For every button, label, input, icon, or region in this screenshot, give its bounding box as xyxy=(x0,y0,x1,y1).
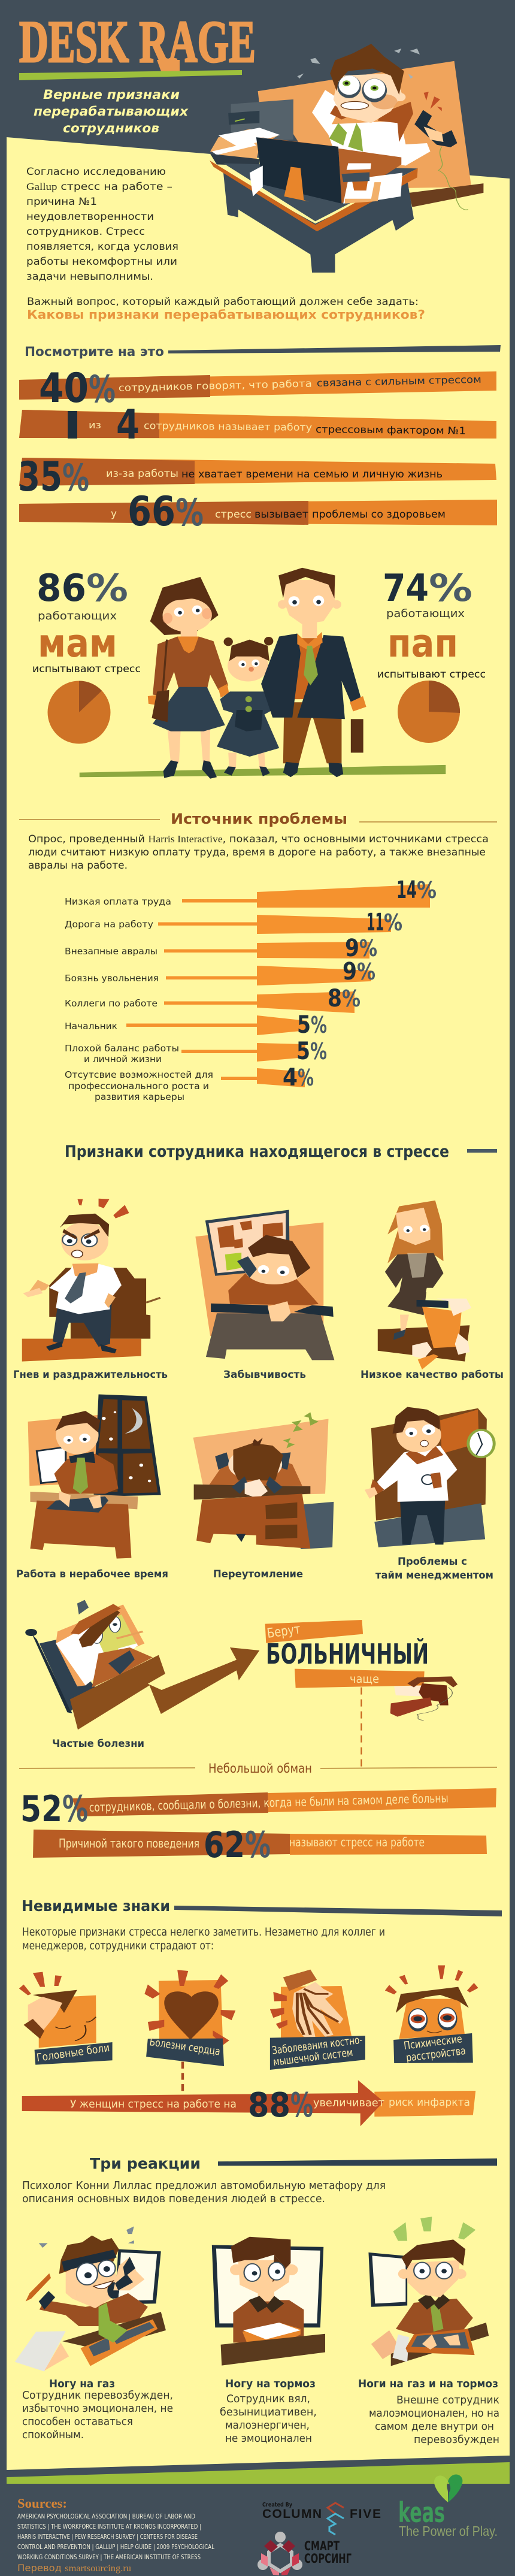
row: lack of growth 4%: Отсутсвие возможностей для xyxy=(65,1069,213,1080)
intro paragraph: неудовлетворенности xyxy=(26,211,154,223)
stat bar: 35%: % xyxy=(62,456,89,500)
row: work-life balance 5%: % xyxy=(310,1038,327,1065)
row: colleagues 8% xyxy=(65,985,360,1013)
moms stat: испытывают стресс xyxy=(32,663,141,675)
column: foot on gas: спокойным. xyxy=(22,2429,84,2441)
phone xyxy=(414,110,458,147)
column: foot on gas: избыточно эмоционален, не xyxy=(22,2403,173,2415)
column: feet on both: малоэмоционален, но на xyxy=(369,2408,499,2420)
stat bar: 66%: % xyxy=(175,491,204,534)
arrow text: women stress 88%: У женщин стресс на работе на xyxy=(70,2098,237,2111)
row: boss 5% xyxy=(65,1011,327,1039)
stat bar: 1 of 4: 4 xyxy=(116,401,140,449)
row: boss 5%: % xyxy=(311,1012,327,1038)
key question: Важный вопрос, который каждый работающий должен себе задать: xyxy=(27,296,419,308)
stat bar: 62%: называют стресс на работе xyxy=(289,1835,425,1849)
captions: signs of stress: тайм менеджментом xyxy=(375,1570,493,1582)
title underline xyxy=(19,70,242,80)
row: fear of layoff 9% xyxy=(65,958,375,985)
phone cord xyxy=(438,147,468,210)
dads stat xyxy=(377,566,486,681)
daughter xyxy=(217,637,279,776)
moms stat xyxy=(32,566,141,675)
stat bar: 35% xyxy=(18,453,496,501)
stat bar: 66%: проблемы со здоровьем xyxy=(312,509,446,520)
intro paragraph: причина №1 xyxy=(26,196,97,208)
mother xyxy=(148,577,229,779)
label: mental disorders: расстройства xyxy=(405,2045,466,2064)
icon: heart disease xyxy=(144,1970,235,2045)
intro paragraph: сотрудников. Стресс xyxy=(26,226,145,238)
stat bar: 66% xyxy=(19,488,497,536)
icon: working overtime at night xyxy=(28,1394,161,1559)
sources: Перевод smartsourcing.ru xyxy=(17,2562,131,2574)
wall panel xyxy=(258,61,471,189)
row: boss 5%: 5 xyxy=(297,1011,311,1039)
column: feet on both: Ноги на газ и на тормоз xyxy=(358,2378,498,2390)
stat bar: 52%: 52 xyxy=(20,1788,62,1830)
dads stat: % xyxy=(429,566,472,610)
dads stat: пап xyxy=(387,621,458,666)
ground xyxy=(80,765,446,777)
arrow: heart attack risk xyxy=(22,2080,475,2126)
label: heart disease: Болезни сердца xyxy=(149,2036,221,2058)
papers and coffee xyxy=(343,173,402,204)
heading: look at this: Посмотрите на это xyxy=(25,344,164,359)
intro paragraph: работы некомфортны или xyxy=(26,256,177,268)
sources: CONTROL AND PREVENTION | GALLUP | HELP GUIDE | 2009 PSYCHOLOGICAL xyxy=(17,2543,215,2551)
row: lack of growth 4%: развития карьеры xyxy=(95,1092,184,1102)
column: feet on both: перевозбужден xyxy=(414,2434,499,2446)
row: work-life balance 5% xyxy=(65,1038,327,1065)
row: colleagues 8%: % xyxy=(342,985,360,1012)
title: DESK RAGE xyxy=(19,8,256,75)
moms stat: % xyxy=(86,566,128,610)
subtitle: перерабатывающих xyxy=(34,104,189,119)
invisible signs paragraph: менеджеров, сотрудники страдают от: xyxy=(22,1939,214,1952)
dashed connector xyxy=(180,2062,185,2095)
stat bar: 1 of 4: стрессовым фактором №1 xyxy=(316,424,466,437)
pie chart: dads 74% xyxy=(398,681,460,743)
row: colleagues 8%: Коллеги по работе xyxy=(65,998,157,1009)
column: foot on brake: безынициативен, xyxy=(220,2406,317,2418)
intro paragraph: появляется, когда условия xyxy=(26,241,178,253)
intro paragraph xyxy=(26,166,178,283)
stat bar: 52% xyxy=(20,1788,496,1830)
tie xyxy=(329,123,347,146)
row: commute 11%: Дорога на работу xyxy=(65,919,153,930)
column: foot on gas xyxy=(22,2378,173,2441)
stat bar: 40% xyxy=(19,365,496,412)
illustration: frequent illness with arrow xyxy=(25,1600,458,1767)
stat bar: 62%: % xyxy=(245,1824,271,1866)
arrow text: women stress 88%: % xyxy=(290,2086,313,2125)
row: sudden rush jobs 9% xyxy=(65,935,377,962)
stat bar: 1 of 4: из xyxy=(89,419,101,431)
dads stat: 74 xyxy=(383,566,429,610)
column: foot on brake: Сотрудник вял, xyxy=(226,2393,310,2405)
pillow and sick man xyxy=(56,1600,153,1688)
moms stat: мам xyxy=(38,621,117,666)
logo: keas: The Power of Play. xyxy=(399,2523,498,2539)
stat bar: 1 of 4: сотрудников называет работу xyxy=(144,420,312,433)
illustration: stressed man at desk xyxy=(210,44,483,273)
row: sudden rush jobs 9%: % xyxy=(359,935,377,962)
heading: source of the problem: Источник проблемы xyxy=(171,811,347,827)
desk base xyxy=(223,173,414,273)
paper stack xyxy=(210,129,279,161)
heading: invisible signs: Невидимые знаки xyxy=(22,1897,170,1915)
stat bar: 62% xyxy=(33,1824,487,1866)
captions: signs of stress: Забывчивость xyxy=(223,1369,306,1381)
captions: signs of stress: Низкое качество работы xyxy=(360,1369,504,1381)
logo: keas xyxy=(398,2475,498,2539)
icon: telephone xyxy=(390,1676,458,1721)
sources: STATISTICS | THE WORKFORCE INSTITUTE AT KRONOS INCORPORATED | xyxy=(17,2523,201,2530)
stat bar: 62%: 62 xyxy=(204,1824,245,1866)
column: foot on brake: не эмоционален xyxy=(225,2433,312,2445)
stat bar: 62%: Причиной такого поведения xyxy=(59,1836,199,1851)
invisible signs paragraph: Некоторые признаки стресса нелегко заметить. Незаметно для коллег и xyxy=(22,1925,385,1939)
row: commute 11%: % xyxy=(384,909,402,936)
sign text: take: Берут xyxy=(266,1622,301,1641)
logo: column five: FIVE xyxy=(350,2507,381,2521)
intro paragraph: Gallup стресс на работе – xyxy=(26,181,172,193)
icon: headache xyxy=(19,1972,96,2048)
icon: forgetful worker xyxy=(195,1210,334,1360)
column: foot on brake xyxy=(220,2378,317,2445)
illustrations: three reactions xyxy=(15,2217,489,2372)
arrow text: women stress 88%: увеличивает xyxy=(313,2097,384,2109)
three reactions paragraph: описания основных видов поведения людей в стрессе. xyxy=(22,2193,325,2205)
stat bar: 66%: 66 xyxy=(128,488,175,536)
sources: Sources: xyxy=(17,2496,67,2511)
logo: smart sourcing xyxy=(258,2532,352,2575)
sweat drops xyxy=(297,49,420,79)
heading: invisible signs xyxy=(22,1897,502,1916)
stat bar: 35%: не хватает времени на семью и личную жизнь xyxy=(181,468,443,480)
source paragraph: люди считают низкую оплату труда, время в дороге на работу, а также внезапные xyxy=(28,846,486,858)
heading: three reactions xyxy=(90,2155,497,2172)
icon: feet on both xyxy=(368,2217,489,2366)
row: lack of growth 4%: % xyxy=(298,1065,314,1091)
dads stat: испытывают стресс xyxy=(377,669,486,681)
stat bar: 40%: % xyxy=(89,367,116,411)
row: lack of growth 4% xyxy=(65,1064,314,1102)
icon: foot on brake xyxy=(212,2237,325,2366)
captions: signs of stress: Переутомление xyxy=(213,1568,303,1580)
column: feet on both: Внешне сотрудник xyxy=(396,2394,499,2406)
arrow text: women stress 88% xyxy=(70,2086,470,2125)
logo: keas: keas xyxy=(398,2496,445,2529)
label: mental disorders: Психические xyxy=(403,2033,463,2052)
logo: column five xyxy=(262,2502,381,2535)
stat bar: 35%: 35 xyxy=(18,453,62,501)
label: musculoskeletal disease xyxy=(271,2034,363,2069)
arrow xyxy=(70,1647,259,1730)
head xyxy=(334,73,402,123)
logo: smart sourcing: СОРСИНГ xyxy=(304,2551,352,2566)
captions: signs of stress: Работа в нерабочее время xyxy=(16,1568,168,1580)
heading: signs of a stressed employee: Признаки сотрудника находящегося в стрессе xyxy=(65,1142,449,1161)
label: musculoskeletal disease: мышечной систем xyxy=(272,2046,354,2069)
invisible signs paragraph xyxy=(22,1925,385,1952)
column: foot on brake: малоэнергичен, xyxy=(225,2420,310,2432)
subtitle: сотрудников xyxy=(63,121,159,135)
sources: WORKING CONDITIONS SURVEY | THE AMERICAN INSTITUTE OF STRESS xyxy=(17,2553,201,2561)
three reactions paragraph: Психолог Конни Лиллас предложил автомобильную метафору для xyxy=(22,2180,386,2192)
icon: foot on gas xyxy=(15,2226,166,2372)
column: foot on gas: Ногу на газ xyxy=(49,2378,115,2390)
column: feet on both: самом деле внутри он xyxy=(375,2421,494,2433)
illustrations: signs of stress xyxy=(22,1199,496,1559)
logo: column five: COLUMN xyxy=(262,2507,322,2521)
logo: smart sourcing: СМАРТ xyxy=(304,2539,340,2553)
row: low pay 14%: Низкая оплата труда xyxy=(65,896,171,907)
row: low pay 14% xyxy=(65,876,437,908)
source paragraph xyxy=(28,833,489,871)
icon: exhausted sleeper xyxy=(193,1412,334,1549)
column: feet on both xyxy=(358,2378,499,2446)
icon: mental disorders xyxy=(385,1966,478,2039)
icon: woman with poor work quality xyxy=(378,1201,471,1369)
row: colleagues 8%: 8 xyxy=(328,985,342,1012)
arrow text: women stress 88%: 88 xyxy=(248,2086,290,2125)
caption: frequent illness: Частые болезни xyxy=(52,1738,144,1750)
stat bar: 52%: % xyxy=(62,1788,88,1830)
chair xyxy=(25,1629,95,1713)
illustrations: invisible symptoms xyxy=(19,1966,478,2126)
row: sudden rush jobs 9%: 9 xyxy=(345,935,359,962)
dads stat: работающих xyxy=(386,607,465,620)
row: lack of growth 4%: 4 xyxy=(283,1064,298,1092)
monitor xyxy=(256,137,401,204)
illustration: family xyxy=(80,568,446,779)
stat bar: 40%: 40 xyxy=(39,365,89,412)
stat bar: 35%: из-за работы xyxy=(106,468,178,479)
icon: angry man xyxy=(22,1199,160,1362)
row: work-life balance 5%: 5 xyxy=(296,1038,310,1065)
mouth xyxy=(341,101,368,110)
label: musculoskeletal disease: Заболевания костно- xyxy=(271,2034,363,2057)
sick leave word: БОЛЬНИЧНЫЙ xyxy=(266,1638,429,1670)
stat bar: 40%: связана с сильным стрессом xyxy=(317,374,481,389)
moms stat: 86 xyxy=(37,566,86,610)
icon: man with a clock xyxy=(365,1407,496,1547)
bar chart: sources of stress xyxy=(65,876,437,1102)
logo: column five: Created By xyxy=(262,2502,292,2508)
row: commute 11% xyxy=(65,909,402,936)
row: work-life balance 5%: и личной жизни xyxy=(84,1054,162,1065)
source paragraph: авралы на работе. xyxy=(28,860,128,871)
row: commute 11%: 11 xyxy=(366,909,384,936)
subtitle: Верные признаки xyxy=(43,87,180,102)
sources: HARRIS INTERACTIVE | PEW RESEARCH SURVEY | CENTERS FOR DISEASE xyxy=(17,2533,198,2541)
row: sudden rush jobs 9%: Внезапные авралы xyxy=(65,946,157,957)
father xyxy=(261,568,366,777)
stat bar: 66%: вызывает xyxy=(255,509,308,520)
row: fear of layoff 9%: Боязнь увольнения xyxy=(65,973,159,984)
column: foot on brake: Ногу на тормоз xyxy=(225,2378,316,2390)
arrow text: women stress 88%: риск инфаркта xyxy=(389,2096,470,2109)
green footer band xyxy=(7,2462,510,2484)
label: mental disorders xyxy=(403,2033,466,2064)
shirt xyxy=(312,90,431,165)
sources: AMERICAN PSYCHOLOGICAL ASSOCIATION | BUREAU OF LABOR AND xyxy=(17,2512,195,2520)
row: lack of growth 4%: профессионального роста и xyxy=(68,1081,209,1092)
subtitle xyxy=(34,87,189,135)
dashed line xyxy=(360,1688,362,1767)
sign text: more often: чаще xyxy=(350,1673,379,1686)
sources xyxy=(17,2496,215,2574)
captions: signs of stress: Проблемы с xyxy=(398,1556,467,1568)
heading: look at this xyxy=(25,344,501,359)
eyes xyxy=(337,75,361,98)
icon: bones xyxy=(270,1970,352,2039)
three reactions paragraph xyxy=(22,2180,386,2205)
label: headaches: Головные боли xyxy=(36,2042,110,2064)
row: low pay 14%: % xyxy=(417,877,437,903)
row: boss 5%: Начальник xyxy=(65,1021,117,1032)
column: foot on gas: способен оставаться xyxy=(22,2416,133,2428)
row: fear of layoff 9%: % xyxy=(357,959,375,985)
key question: Каковы признаки перерабатывающих сотрудников? xyxy=(27,307,425,322)
heading: a small deception: Небольшой обман xyxy=(208,1761,312,1776)
stat bar: 66%: у xyxy=(111,508,117,519)
moms stat: работающих xyxy=(38,610,117,622)
captions: signs of stress xyxy=(13,1369,504,1582)
row: fear of layoff 9%: 9 xyxy=(343,958,357,985)
sign: more often xyxy=(295,1669,425,1688)
stat bar: 1 of 4 xyxy=(19,401,496,449)
column: foot on gas: Сотрудник перевозбужден, xyxy=(22,2390,173,2402)
title xyxy=(19,8,256,75)
label plates xyxy=(35,2033,473,2070)
intro paragraph: Согласно исследованию xyxy=(26,166,166,178)
key question xyxy=(27,296,425,322)
sign: take xyxy=(265,1620,363,1643)
row: work-life balance 5%: Плохой баланс работы xyxy=(65,1043,179,1054)
pie chart: moms 86% xyxy=(48,681,110,744)
source paragraph: Опрос, проведенный Harris Interactive , показал, что основными источниками стресса xyxy=(28,833,489,845)
captions: signs of stress: Гнев и раздражительность xyxy=(13,1369,168,1381)
stat bar: 40%: сотрудников говорят, что работа xyxy=(119,378,312,394)
row: low pay 14%: 14 xyxy=(396,876,417,904)
intro paragraph: задачи невыполнимы. xyxy=(26,271,153,283)
heading: three reactions: Три реакции xyxy=(90,2155,201,2172)
stat bar: 66%: стресс xyxy=(215,509,252,520)
